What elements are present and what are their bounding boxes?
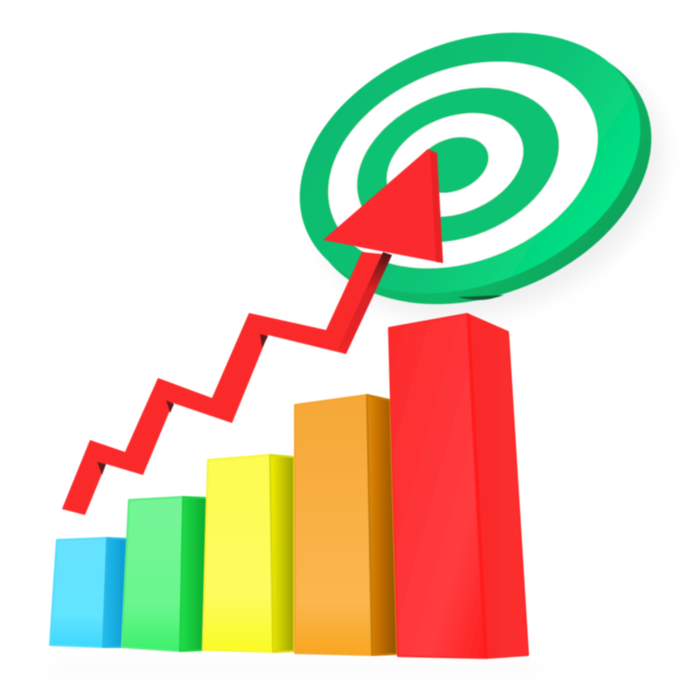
inner white ring (371, 94, 539, 236)
target side edge (269, 0, 691, 353)
rising arrow (62, 149, 443, 515)
dark underside notch (458, 295, 504, 300)
target outer ring (261, 0, 679, 341)
floor reflection (50, 660, 540, 678)
red bar (389, 314, 528, 658)
inner green ring (334, 59, 582, 271)
target shadow (281, 5, 700, 367)
blue bar (50, 538, 127, 647)
green bar (122, 497, 207, 651)
shaft shaded side (338, 252, 392, 354)
bullseye (407, 127, 497, 203)
white ring (297, 24, 629, 306)
arrow head side (430, 150, 443, 263)
arrow shaft (62, 252, 392, 515)
arrow head (323, 149, 443, 263)
bar chart (50, 314, 528, 658)
orange bar (295, 395, 397, 655)
target (261, 0, 691, 353)
shaft notch shadows (97, 334, 268, 475)
yellow bar (203, 455, 294, 652)
